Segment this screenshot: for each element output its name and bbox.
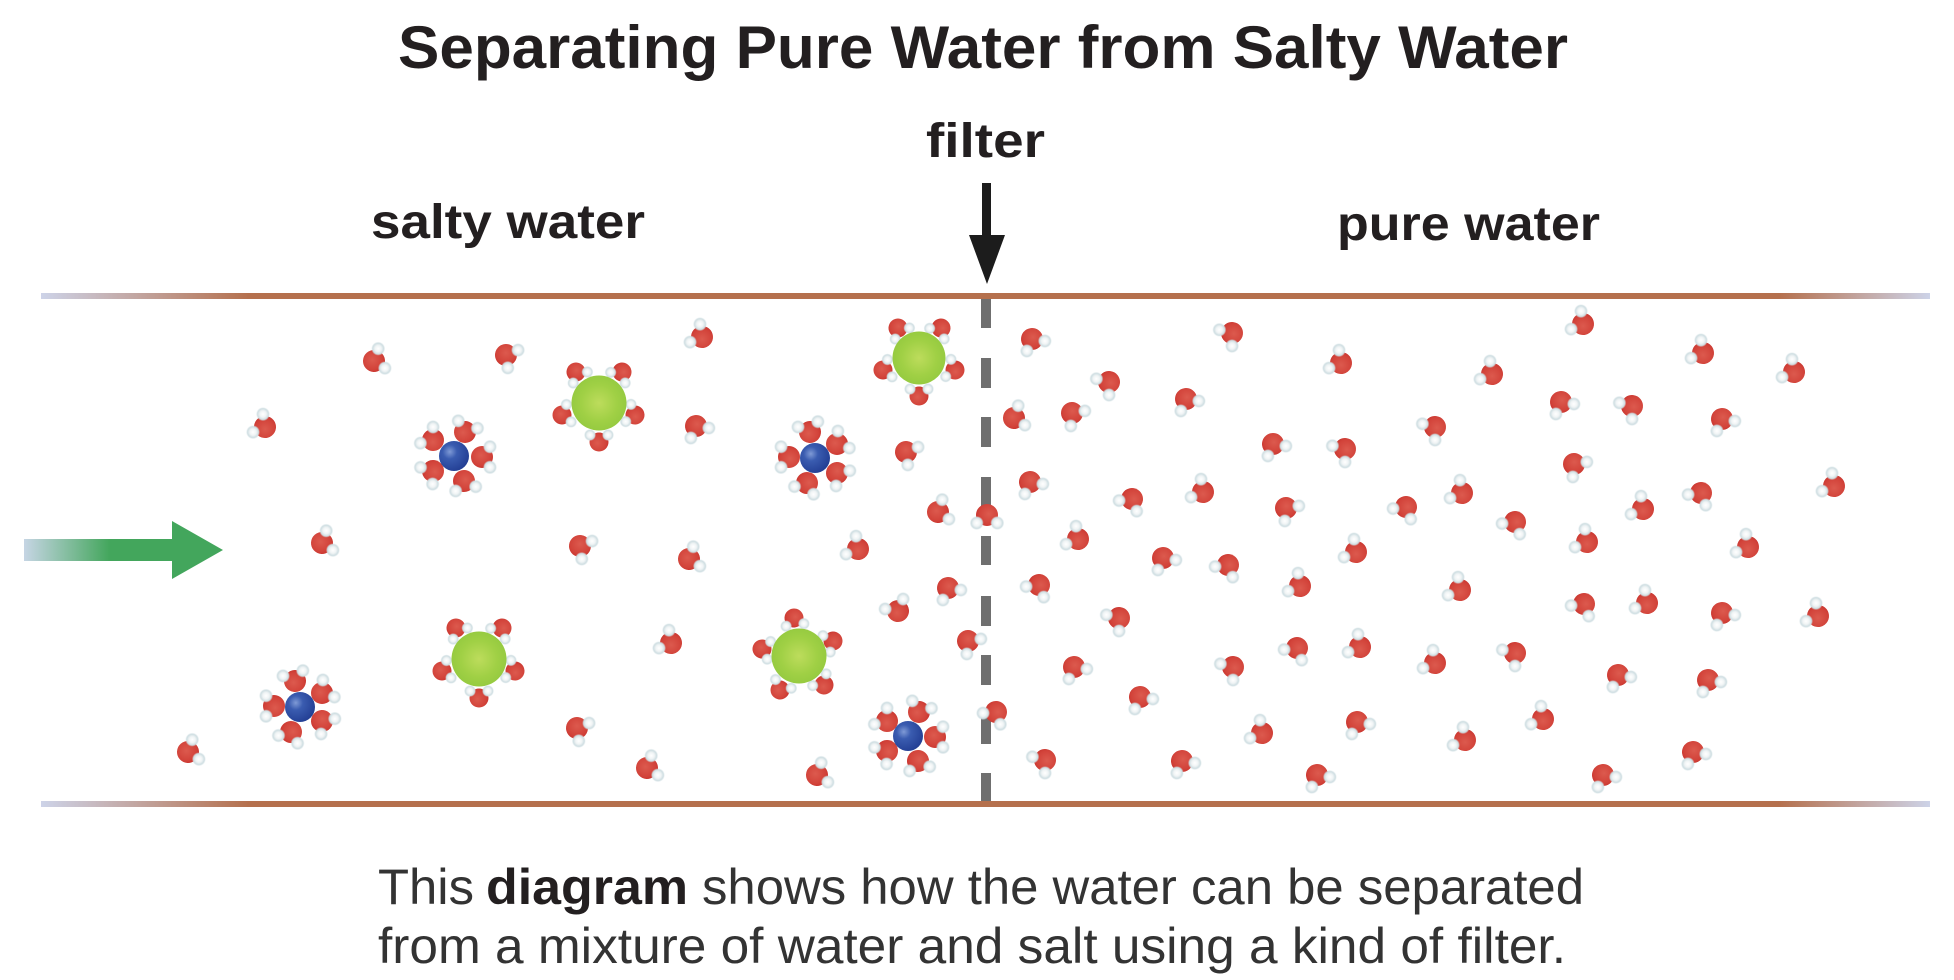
sodium ion cluster 2 — [774, 413, 860, 503]
caption: diagram — [486, 859, 688, 915]
title: Separating Pure Water from Salty Water — [398, 14, 1568, 81]
chloride ion cluster 2 — [429, 611, 528, 708]
caption: This — [378, 859, 474, 915]
caption: from a mixture of water and salt using a kind of filter. — [378, 918, 1566, 974]
label: filter: filter — [926, 115, 1045, 168]
tube: top wall — [41, 293, 1930, 299]
sodium ion cluster 1 — [411, 412, 497, 499]
label: salty water: salty water — [371, 196, 645, 249]
free water molecules: salty side — [172, 315, 991, 795]
free water molecules: pure side — [998, 302, 1852, 797]
caption: shows how the water can be separated — [702, 859, 1584, 915]
arrow: pointing down at filter — [969, 183, 1005, 284]
label: pure water: pure water — [1337, 198, 1600, 251]
chloride ion cluster 3 — [870, 311, 968, 406]
filter: dashed membrane — [981, 299, 991, 802]
sodium ion cluster 4 — [259, 662, 345, 752]
chloride ion cluster 4 — [750, 607, 848, 706]
arrow: green flow direction — [24, 521, 223, 579]
tube: bottom wall — [41, 801, 1930, 807]
caption — [378, 859, 1584, 974]
chloride ion cluster 1 — [549, 355, 648, 452]
sodium ion cluster 3 — [865, 692, 950, 779]
water molecules passing through filter — [970, 504, 1016, 734]
